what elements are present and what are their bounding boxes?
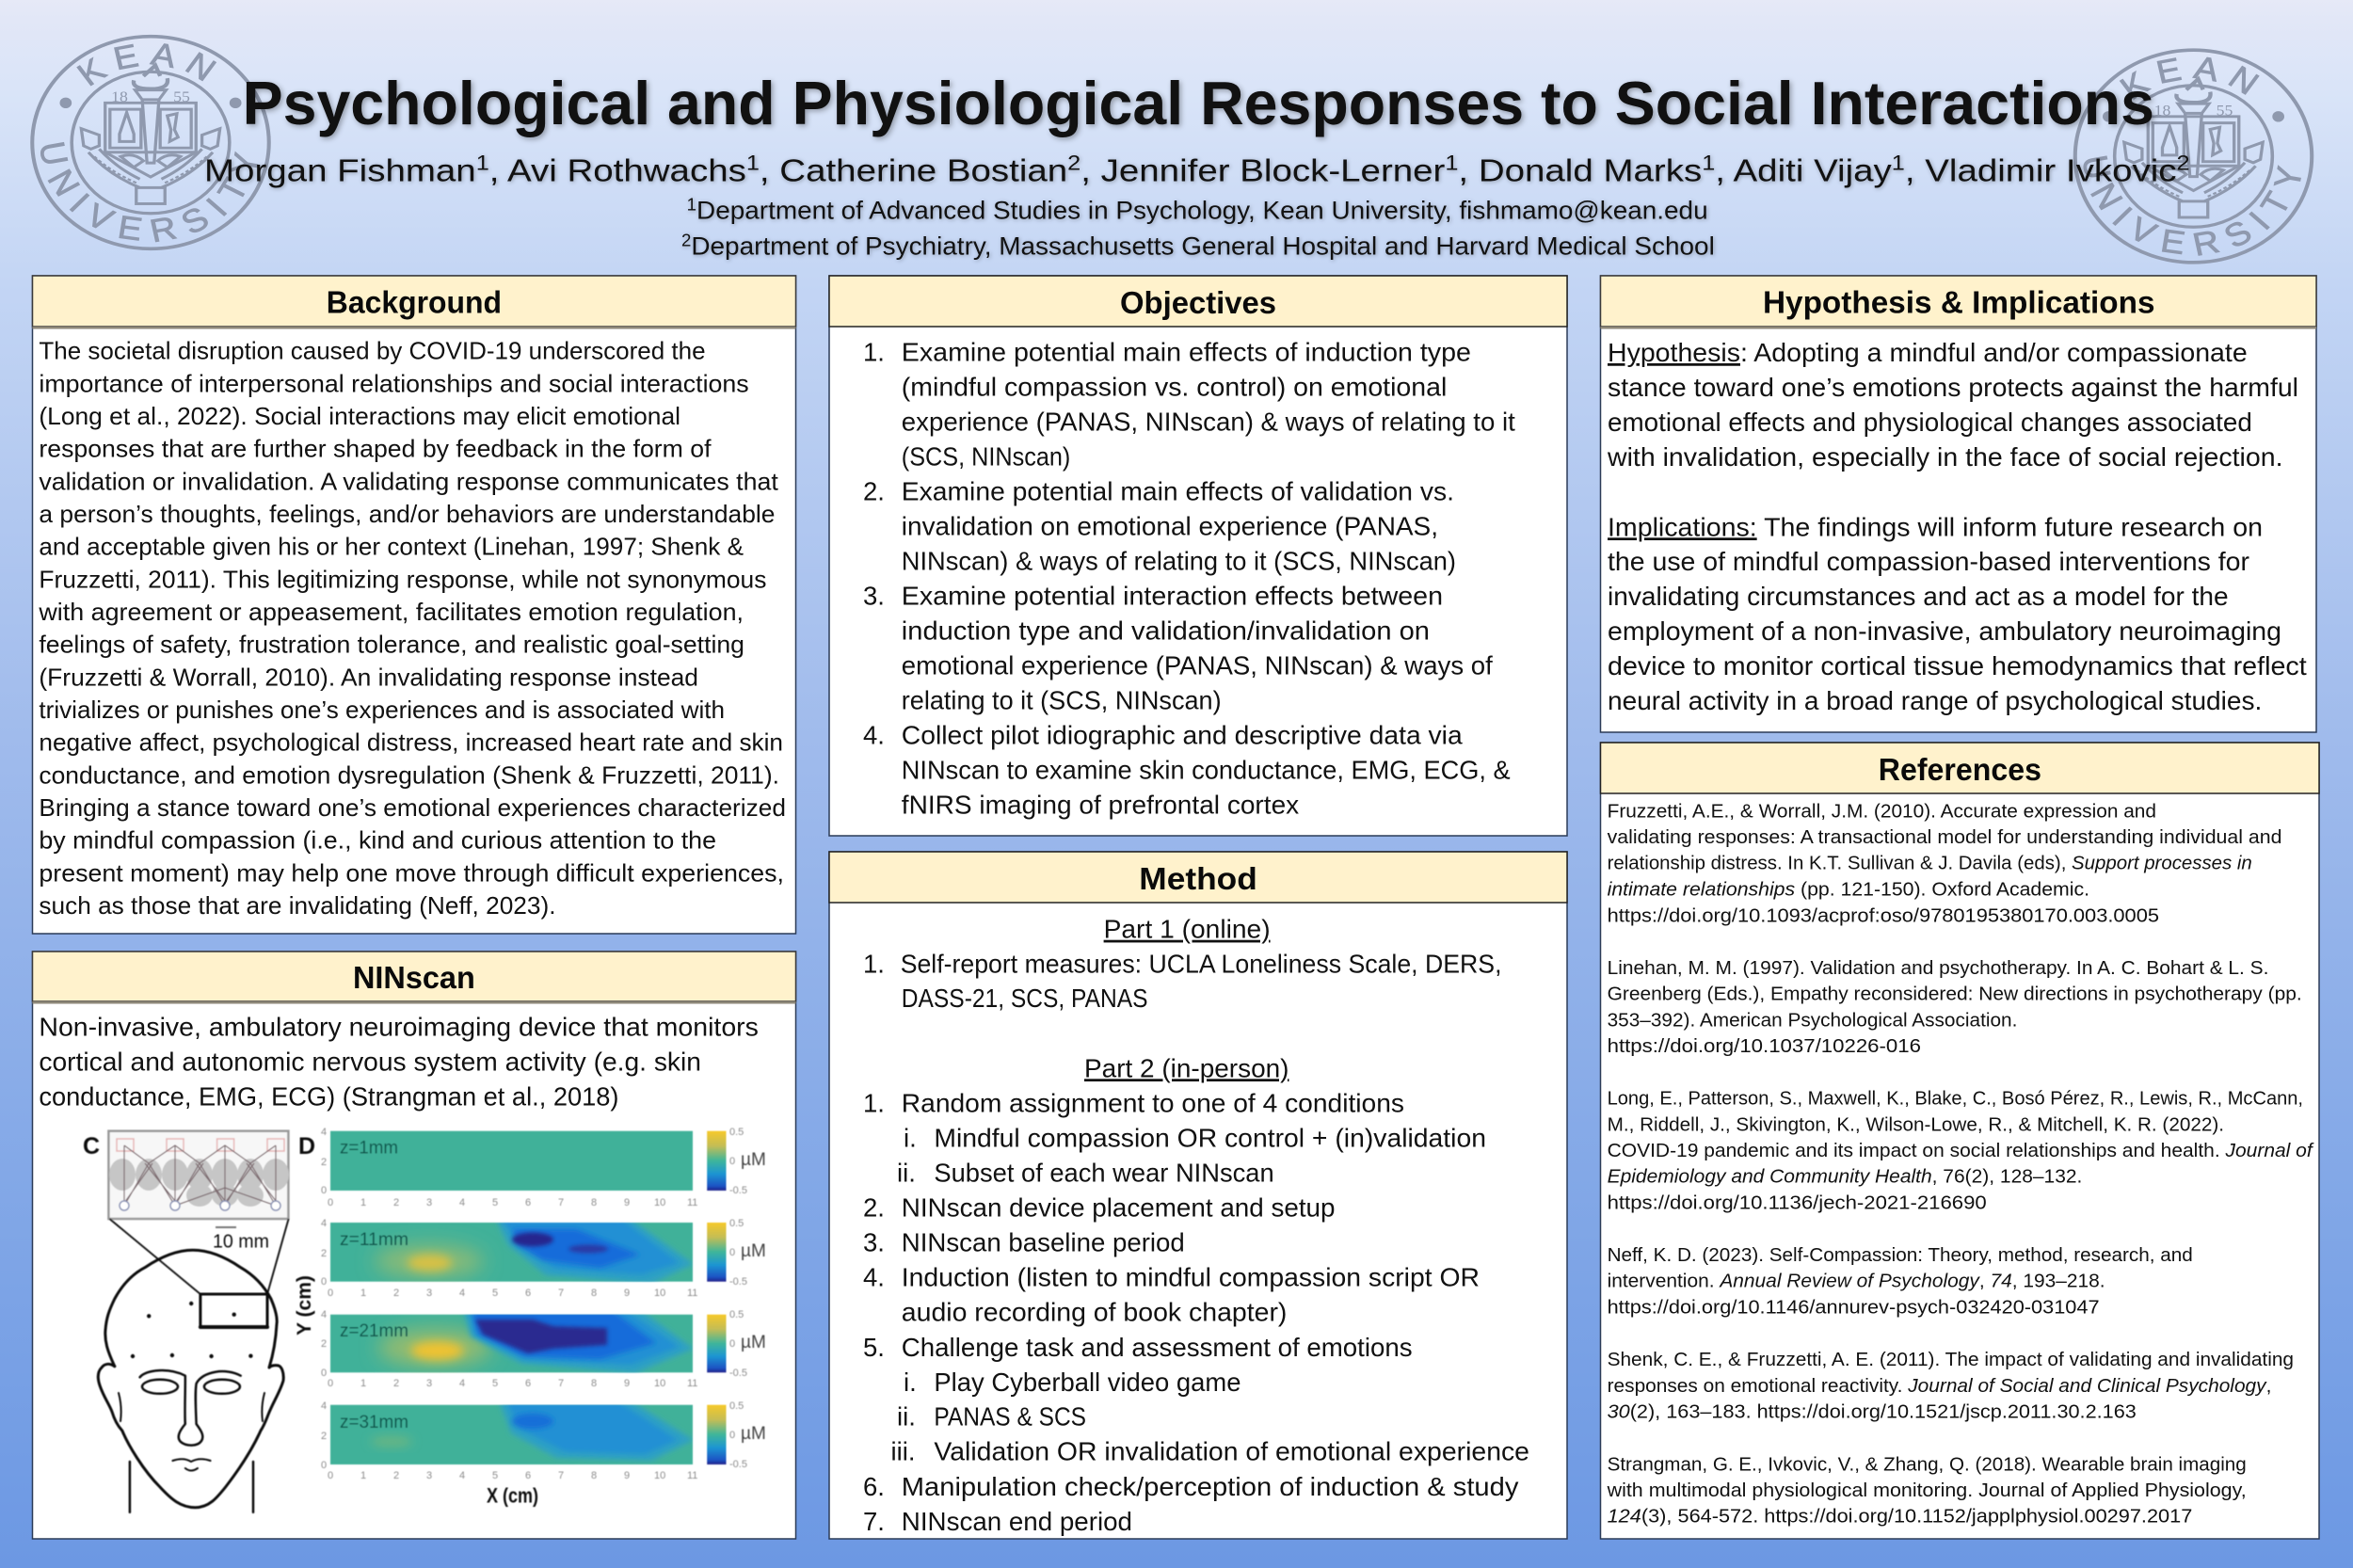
colour bar units bbox=[729, 1127, 766, 1470]
heading: hypothesis and implications: Hypothesis & Implications bbox=[1763, 285, 2155, 320]
axis ticks bbox=[321, 1127, 697, 1481]
reference: Long et al.: Long, E., Patterson, S., Maxwell, K., Blake, C., Bosó Pérez, R., Lewis, R., McCann, bbox=[1608, 1088, 2303, 1110]
list: part 2 in person: NINscan baseline period bbox=[902, 1227, 1185, 1256]
heading: method: Method bbox=[1139, 861, 1257, 896]
axis ticks: 3 bbox=[426, 1378, 432, 1389]
axis ticks: 11 bbox=[687, 1288, 697, 1299]
text block: NINscan description bbox=[39, 1013, 759, 1111]
axis label: Y: Y (cm) bbox=[294, 1275, 315, 1336]
numbered list: objectives bbox=[863, 337, 1515, 820]
list: part 1 online: DASS-21, SCS, PANAS bbox=[902, 984, 1148, 1013]
axis ticks: 10 bbox=[654, 1470, 665, 1481]
axis ticks: 3 bbox=[426, 1288, 432, 1299]
reference: Long et al.: M., Riddell, J., Skivington, K., Wilson-Lowe, R., & Mitchell, K. R. (2022). bbox=[1608, 1113, 2224, 1135]
text block: background: The societal disruption caused by COVID-19 underscored the bbox=[39, 337, 706, 365]
colour bar units: 0 bbox=[729, 1247, 735, 1258]
colour bar units: 0 bbox=[729, 1156, 735, 1167]
numbered list: objectives: 2. bbox=[863, 476, 885, 505]
authors: 1 bbox=[1445, 151, 1458, 174]
text block: background bbox=[38, 337, 786, 920]
reference: Neff: https://doi.org/10.1146/annurev-psych-032420-031047 bbox=[1608, 1296, 2100, 1318]
list: part 2 in person: Induction (listen to mindful compassion script OR bbox=[902, 1263, 1480, 1291]
numbered list: objectives: experience (PANAS, NINscan) & ways of relating to it bbox=[902, 407, 1515, 436]
list: part 2 in person: i. bbox=[904, 1124, 917, 1152]
axis ticks: 4 bbox=[459, 1378, 465, 1389]
authors: 1 bbox=[746, 151, 760, 174]
heat map z=1mm: z=1mm bbox=[340, 1139, 398, 1159]
text block: background: (Fruzzetti & Worrall, 2010). An invalidating response instead bbox=[39, 663, 698, 691]
axis ticks: 4 bbox=[321, 1309, 327, 1320]
text block: implications: employment of a non-invasive, ambulatory neuroimaging bbox=[1608, 616, 2281, 646]
reference: Fruzzetti and Worrall: validating responses: A transactional model for understanding individual and bbox=[1608, 826, 2281, 848]
axis ticks: 5 bbox=[492, 1288, 498, 1299]
list: part 2 in person: audio recording of book chapter) bbox=[902, 1298, 1287, 1327]
reference: Fruzzetti and Worrall: intimate relationships (pp. 121-150). Oxford Academic. bbox=[1608, 879, 2089, 901]
text block: NINscan description: Non-invasive, ambulatory neuroimaging device that monitors bbox=[39, 1013, 759, 1042]
panel: objectives bbox=[829, 276, 1567, 836]
reference: Fruzzetti and Worrall: Fruzzetti, A.E., & Worrall, J.M. (2010). Accurate expression and bbox=[1608, 800, 2156, 822]
list: part 2 in person: ii. bbox=[897, 1402, 916, 1432]
list: part 2 in person: Play Cyberball video game bbox=[934, 1368, 1241, 1397]
reference: Fruzzetti and Worrall: relationship distress. In K.T. Sullivan & J. Davila (eds), Support processes in bbox=[1608, 853, 2252, 874]
axis ticks: 0 bbox=[321, 1368, 327, 1379]
axis ticks: 3 bbox=[426, 1197, 432, 1208]
list: part 2 in person: Subset of each wear NINscan bbox=[934, 1159, 1274, 1188]
axis ticks: 6 bbox=[525, 1288, 531, 1299]
axis ticks: 10 bbox=[654, 1197, 665, 1208]
axis ticks: 2 bbox=[393, 1378, 399, 1389]
list: part 2 in person: 6. bbox=[863, 1472, 885, 1501]
list: part 2 in person: 7. bbox=[863, 1507, 885, 1536]
axis ticks: 10 bbox=[654, 1288, 665, 1299]
reference: Long et al.: Epidemiology and Community Health, 76(2), 128–132. bbox=[1608, 1166, 2082, 1188]
heat map z=31mm: z=31mm bbox=[340, 1413, 408, 1432]
numbered list: objectives: relating to it (SCS, NINscan) bbox=[902, 686, 1222, 715]
axis ticks: 2 bbox=[393, 1288, 399, 1299]
list: part 2 in person: Challenge task and assessment of emotions bbox=[902, 1333, 1413, 1362]
axis ticks: 1 bbox=[360, 1470, 366, 1481]
axis ticks: 2 bbox=[321, 1431, 327, 1442]
text block: background: (Long et al., 2022). Social interactions may elicit emotional bbox=[39, 402, 680, 430]
authors: , Vladimir Ivkovic bbox=[1905, 153, 2177, 188]
axis ticks: 0 bbox=[328, 1197, 333, 1208]
numbered list: objectives: 3. bbox=[863, 582, 885, 610]
authors: 1 bbox=[1702, 151, 1715, 174]
axis ticks: 11 bbox=[687, 1197, 697, 1208]
axis ticks: 4 bbox=[321, 1218, 327, 1229]
heat map z=31mm bbox=[330, 1400, 727, 1464]
colour bar units: -0.5 bbox=[729, 1368, 747, 1379]
heading: background: Background bbox=[327, 285, 502, 320]
axis ticks: 2 bbox=[321, 1248, 327, 1259]
numbered list: objectives: NINscan) & ways of relating to it (SCS, NINscan) bbox=[902, 546, 1456, 576]
logo: Kean University seal, left: 18 bbox=[111, 88, 128, 105]
list: part 2 in person: Random assignment to one of 4 conditions bbox=[902, 1088, 1404, 1117]
list: part 2 in person: 5. bbox=[863, 1333, 885, 1362]
affiliation 2: Department of Psychiatry, Massachusetts General Hospital and Harvard Medical School bbox=[691, 232, 1715, 261]
heat map z=11mm: z=11mm bbox=[340, 1230, 408, 1250]
reference: Fruzzetti and Worrall bbox=[1608, 800, 2281, 926]
axis ticks: 9 bbox=[624, 1470, 630, 1481]
text block: background: and acceptable given his or her context (Linehan, 1997; Shenk & bbox=[39, 533, 744, 561]
list: part 2 in person: Mindful compassion OR control + (in)validation bbox=[934, 1124, 1486, 1152]
numbered list: objectives: induction type and validation/invalidation on bbox=[902, 616, 1430, 646]
text block: implications bbox=[1608, 512, 2307, 715]
heat map z=11mm bbox=[330, 1219, 727, 1284]
text block: background: such as those that are invalidating (Neff, 2023). bbox=[39, 891, 555, 920]
numbered list: objectives: (mindful compassion vs. control) on emotional bbox=[902, 372, 1447, 401]
axis ticks: 9 bbox=[624, 1378, 630, 1389]
affiliation 1: 1 bbox=[687, 196, 696, 215]
text block: background: trivializes or punishes one’s experiences and is associated with bbox=[39, 696, 725, 724]
reference: Linehan: https://doi.org/10.1037/10226-016 bbox=[1608, 1035, 1921, 1057]
panel: method bbox=[829, 852, 1567, 1539]
reference: Neff: Neff, K. D. (2023). Self-Compassion: Theory, method, research, and bbox=[1608, 1244, 2193, 1266]
affiliation 1: Department of Advanced Studies in Psychology, Kean University, fishmamo@kean.edu bbox=[696, 197, 1708, 225]
axis ticks: 0 bbox=[328, 1288, 333, 1299]
list: part 2 in person: NINscan device placement and setup bbox=[902, 1192, 1335, 1222]
numbered list: objectives: Collect pilot idiographic and descriptive data via bbox=[902, 721, 1463, 750]
list: part 2 in person: NINscan end period bbox=[902, 1507, 1132, 1536]
colour bar units: 0 bbox=[729, 1338, 735, 1350]
axis ticks: 7 bbox=[558, 1470, 564, 1481]
heading: NINscan: NINscan bbox=[353, 960, 475, 995]
reference: Neff bbox=[1608, 1244, 2193, 1318]
heat map z=1mm bbox=[330, 1131, 727, 1191]
list: part 2 in person: 2. bbox=[863, 1192, 885, 1222]
axis ticks: 9 bbox=[624, 1288, 630, 1299]
authors: 2 bbox=[1067, 151, 1080, 174]
colour bar units: µM bbox=[741, 1241, 766, 1261]
text block: implications: the use of mindful compassion-based interventions for bbox=[1608, 547, 2249, 576]
colour bar units: 0.5 bbox=[729, 1400, 744, 1412]
colour bar units: µM bbox=[741, 1333, 766, 1352]
authors: Morgan Fishman bbox=[204, 153, 440, 188]
axis ticks: 4 bbox=[321, 1400, 327, 1412]
numbered list: objectives: (SCS, NINscan) bbox=[902, 441, 1070, 471]
axis ticks: 2 bbox=[321, 1338, 327, 1350]
reference: Linehan: Linehan, M. M. (1997). Validation and psychotherapy. In A. C. Bohart & L. S. bbox=[1608, 957, 2268, 979]
list: part 1 online: Self-report measures: UCLA Loneliness Scale, DERS, bbox=[901, 949, 1502, 978]
reference: Strangman et al. bbox=[1607, 1453, 2247, 1528]
numbered list: objectives: invalidation on emotional experience (PANAS, bbox=[902, 512, 1438, 540]
authors: , Catherine Bostian bbox=[760, 153, 1067, 188]
figure: depth heat maps: D bbox=[298, 1133, 315, 1160]
list: part 2 in person bbox=[863, 1053, 1529, 1536]
logo: Kean University seal, right: UNIVERSITY bbox=[2084, 155, 2301, 256]
axis ticks: 11 bbox=[687, 1470, 697, 1481]
axis ticks: 1 bbox=[360, 1288, 366, 1299]
logo: Kean University seal, left: KEAN bbox=[76, 43, 216, 87]
authors: 2 bbox=[2177, 151, 2190, 174]
axis ticks: 6 bbox=[525, 1378, 531, 1389]
text block: background: a person’s thoughts, feelings, and/or behaviors are understandable bbox=[39, 500, 775, 528]
logo: Kean University seal, left: UNIVERSITY bbox=[40, 141, 258, 243]
axis ticks: 4 bbox=[459, 1197, 465, 1208]
reference: Long et al.: https://doi.org/10.1136/jech-2021-216690 bbox=[1608, 1192, 1987, 1213]
logo: Kean University seal, left: 55 bbox=[173, 88, 190, 105]
axis ticks: 7 bbox=[558, 1197, 564, 1208]
text block: background: Bringing a stance toward one’s emotional experiences characterized bbox=[39, 793, 786, 822]
list: part 2 in person: Part 2 (in-person) bbox=[1084, 1053, 1289, 1082]
colour bar units: -0.5 bbox=[729, 1276, 747, 1288]
list: part 2 in person: PANAS & SCS bbox=[934, 1402, 1086, 1432]
text block: background: conductance, and emotion dysregulation (Shenk & Fruzzetti, 2011). bbox=[39, 760, 779, 789]
text block: background: present moment) may help one move through difficult experiences, bbox=[39, 858, 784, 887]
axis ticks: 8 bbox=[591, 1288, 597, 1299]
text block: implications: neural activity in a broad range of psychological studies. bbox=[1608, 686, 2262, 715]
logo: Kean University seal, left bbox=[30, 34, 271, 250]
list: part 2 in person: 1. bbox=[863, 1088, 885, 1117]
heading: objectives: Objectives bbox=[1120, 285, 1276, 320]
text block: background: with agreement or appeasement, facilitates emotion regulation, bbox=[38, 598, 744, 626]
text block: hypothesis: with invalidation, especially in the face of social rejection. bbox=[1607, 442, 2283, 472]
reference: Linehan bbox=[1608, 957, 2302, 1057]
numbered list: objectives: 4. bbox=[863, 721, 885, 750]
axis ticks: 4 bbox=[459, 1470, 465, 1481]
axis ticks: 1 bbox=[360, 1197, 366, 1208]
axis ticks: 9 bbox=[624, 1197, 630, 1208]
axis ticks: 10 bbox=[654, 1378, 665, 1389]
text block: hypothesis: emotional effects and physiological changes associated bbox=[1608, 408, 2252, 437]
axis ticks: 0 bbox=[321, 1185, 327, 1196]
axis ticks: 6 bbox=[525, 1470, 531, 1481]
axis ticks: 0 bbox=[321, 1276, 327, 1288]
colour bar units: 0 bbox=[729, 1430, 735, 1441]
numbered list: objectives: Examine potential interaction effects between bbox=[902, 582, 1443, 610]
text block: hypothesis: stance toward one’s emotions protects against the harmful bbox=[1608, 373, 2298, 402]
list: part 2 in person: 3. bbox=[863, 1227, 885, 1256]
authors: , Jennifer Block-Lerner bbox=[1080, 153, 1445, 188]
authors: 1 bbox=[1892, 151, 1905, 174]
axis ticks: 0 bbox=[328, 1470, 333, 1481]
authors: , Aditi Vijay bbox=[1715, 153, 1892, 188]
list: part 2 in person: ii. bbox=[897, 1159, 916, 1188]
text block: implications: Implications: The findings will inform future research on bbox=[1608, 512, 2263, 541]
colour bar units: -0.5 bbox=[729, 1185, 747, 1196]
affiliation 2: 2 bbox=[681, 232, 691, 250]
axis ticks: 11 bbox=[687, 1378, 697, 1389]
text block: hypothesis: Hypothesis: Adopting a mindful and/or compassionate bbox=[1608, 338, 2248, 367]
colour bar units: 0.5 bbox=[729, 1309, 744, 1320]
panel: references bbox=[1600, 743, 2319, 1539]
text block: NINscan description: cortical and autonomic nervous system activity (e.g. skin bbox=[39, 1048, 701, 1077]
numbered list: objectives: Examine potential main effects of validation vs. bbox=[902, 476, 1454, 505]
reference: Shenk and Fruzzetti: 30(2), 163–183. https://doi.org/10.1521/jscp.2011.30.2.163 bbox=[1608, 1401, 2137, 1423]
text block: background: importance of interpersonal relationships and social interactions bbox=[39, 369, 749, 397]
reference: Fruzzetti and Worrall: https://doi.org/10.1093/acprof:oso/9780195380170.003.0005 bbox=[1608, 904, 2159, 926]
list: part 1 online: Part 1 (online) bbox=[1104, 915, 1271, 944]
numbered list: objectives: fNIRS imaging of prefrontal cortex bbox=[902, 791, 1299, 820]
axis ticks: 5 bbox=[492, 1470, 498, 1481]
logo: Kean University seal, right: 55 bbox=[2217, 103, 2233, 119]
numbered list: objectives: Examine potential main effects of induction type bbox=[902, 337, 1471, 366]
axis ticks: 8 bbox=[591, 1197, 597, 1208]
colour bar units: µM bbox=[741, 1424, 766, 1444]
heat map z=21mm bbox=[330, 1310, 727, 1373]
colour bar units: µM bbox=[741, 1150, 766, 1170]
axis ticks: 4 bbox=[321, 1127, 327, 1138]
numbered list: objectives: emotional experience (PANAS, NINscan) & ways of bbox=[902, 651, 1493, 680]
list: part 1 online bbox=[863, 915, 1502, 1013]
reference: Strangman et al.: 124(3), 564-572. https://doi.org/10.1152/japplphysiol.00297.2017 bbox=[1608, 1506, 2192, 1528]
axis ticks: 2 bbox=[393, 1197, 399, 1208]
text block: background: validation or invalidation. A validating response communicates that bbox=[39, 467, 779, 495]
reference: Shenk and Fruzzetti: Shenk, C. E., & Fruzzetti, A. E. (2011). The impact of validating and invalidating bbox=[1608, 1349, 2294, 1370]
list: part 2 in person: 4. bbox=[863, 1263, 885, 1291]
authors: , Avi Rothwachs bbox=[489, 153, 746, 188]
reference: Long et al.: COVID-19 pandemic and its impact on social relationships and health. Journal of bbox=[1608, 1140, 2314, 1161]
axis ticks: 6 bbox=[525, 1197, 531, 1208]
text block: hypothesis bbox=[1607, 338, 2298, 472]
logo: Kean University seal, right bbox=[2073, 48, 2313, 264]
axis ticks: 7 bbox=[558, 1288, 564, 1299]
list: part 2 in person: iii. bbox=[890, 1437, 915, 1466]
axis ticks: 8 bbox=[591, 1470, 597, 1481]
heat map z=21mm: z=21mm bbox=[340, 1321, 408, 1341]
reference: Shenk and Fruzzetti bbox=[1608, 1349, 2294, 1423]
axis ticks: 5 bbox=[492, 1378, 498, 1389]
reference: Neff: intervention. Annual Review of Psychology, 74, 193–218. bbox=[1608, 1271, 2105, 1292]
axis ticks: 0 bbox=[321, 1460, 327, 1471]
reference: Shenk and Fruzzetti: responses on emotional reactivity. Journal of Social and Clinical Psychology, bbox=[1608, 1375, 2271, 1397]
figure: head diagram with optode layout: C bbox=[83, 1133, 100, 1160]
text block: background: Fruzzetti, 2011). This legitimizing response, while not synonymous bbox=[39, 565, 766, 593]
axis ticks: 1 bbox=[360, 1378, 366, 1389]
axis ticks: 2 bbox=[321, 1157, 327, 1168]
colour bar units: -0.5 bbox=[729, 1459, 747, 1470]
list: part 2 in person: i. bbox=[904, 1368, 917, 1397]
reference: Linehan: 353–392). American Psychological Association. bbox=[1608, 1009, 2017, 1031]
text block: implications: device to monitor cortical tissue hemodynamics that reflect bbox=[1608, 651, 2307, 680]
reference: Long et al. bbox=[1608, 1088, 2314, 1213]
axis ticks: 4 bbox=[459, 1288, 465, 1299]
panel: hypothesis and implications bbox=[1600, 276, 2316, 732]
reference: Strangman et al.: Strangman, G. E., Ivkovic, V., & Zhang, Q. (2018). Wearable brain imaging bbox=[1608, 1453, 2247, 1475]
text block: background: feelings of safety, frustration tolerance, and realistic goal-setting bbox=[39, 631, 744, 659]
authors: 1 bbox=[476, 151, 489, 174]
axis ticks: 8 bbox=[591, 1378, 597, 1389]
figure: head diagram with optode layout: 10 mm bbox=[213, 1232, 269, 1253]
colour bar units: 0.5 bbox=[729, 1127, 744, 1138]
numbered list: objectives: NINscan to examine skin conductance, EMG, ECG, & bbox=[902, 756, 1511, 785]
text block: NINscan description: conductance, EMG, ECG) (Strangman et al., 2018) bbox=[39, 1081, 618, 1111]
panel: NINscan bbox=[32, 952, 796, 1539]
list: part 2 in person: Manipulation check/perception of induction & study bbox=[902, 1472, 1519, 1501]
heading: references: References bbox=[1879, 752, 2041, 787]
title: Psychological and Physiological Responses to Social Interactions bbox=[243, 69, 2154, 137]
panel: background bbox=[32, 276, 796, 934]
axis label: X: X (cm) bbox=[487, 1484, 538, 1508]
colour bar units: 0.5 bbox=[729, 1218, 744, 1229]
logo: Kean University seal, right: 18 bbox=[2154, 103, 2170, 119]
axis ticks: 3 bbox=[426, 1470, 432, 1481]
reference: Linehan: Greenberg (Eds.), Empathy reconsidered: New directions in psychotherapy (pp. bbox=[1608, 984, 2302, 1005]
figure: depth heat maps bbox=[294, 1127, 766, 1508]
text block: background: negative affect, psychological distress, increased heart rate and skin bbox=[39, 728, 783, 757]
list: part 2 in person: Validation OR invalidation of emotional experience bbox=[934, 1437, 1529, 1466]
logo: Kean University seal, right: KEAN bbox=[2120, 56, 2260, 100]
text block: background: by mindful compassion (i.e., kind and curious attention to the bbox=[39, 826, 716, 855]
authors: , Donald Marks bbox=[1458, 153, 1702, 188]
axis ticks: 5 bbox=[492, 1197, 498, 1208]
figure: head diagram with optode layout bbox=[83, 1131, 289, 1512]
text block: implications: invalidating circumstances and act as a model for the bbox=[1608, 582, 2229, 611]
axis ticks: 0 bbox=[328, 1378, 333, 1389]
axis ticks: 7 bbox=[558, 1378, 564, 1389]
axis ticks: 2 bbox=[393, 1470, 399, 1481]
text block: background: responses that are further shaped by feedback in the form of bbox=[39, 435, 712, 463]
list: part 1 online: 1. bbox=[863, 949, 885, 978]
numbered list: objectives: 1. bbox=[863, 337, 885, 366]
reference: Strangman et al.: with multimodal physiological monitoring. Journal of Applied Physiology, bbox=[1607, 1480, 2247, 1501]
